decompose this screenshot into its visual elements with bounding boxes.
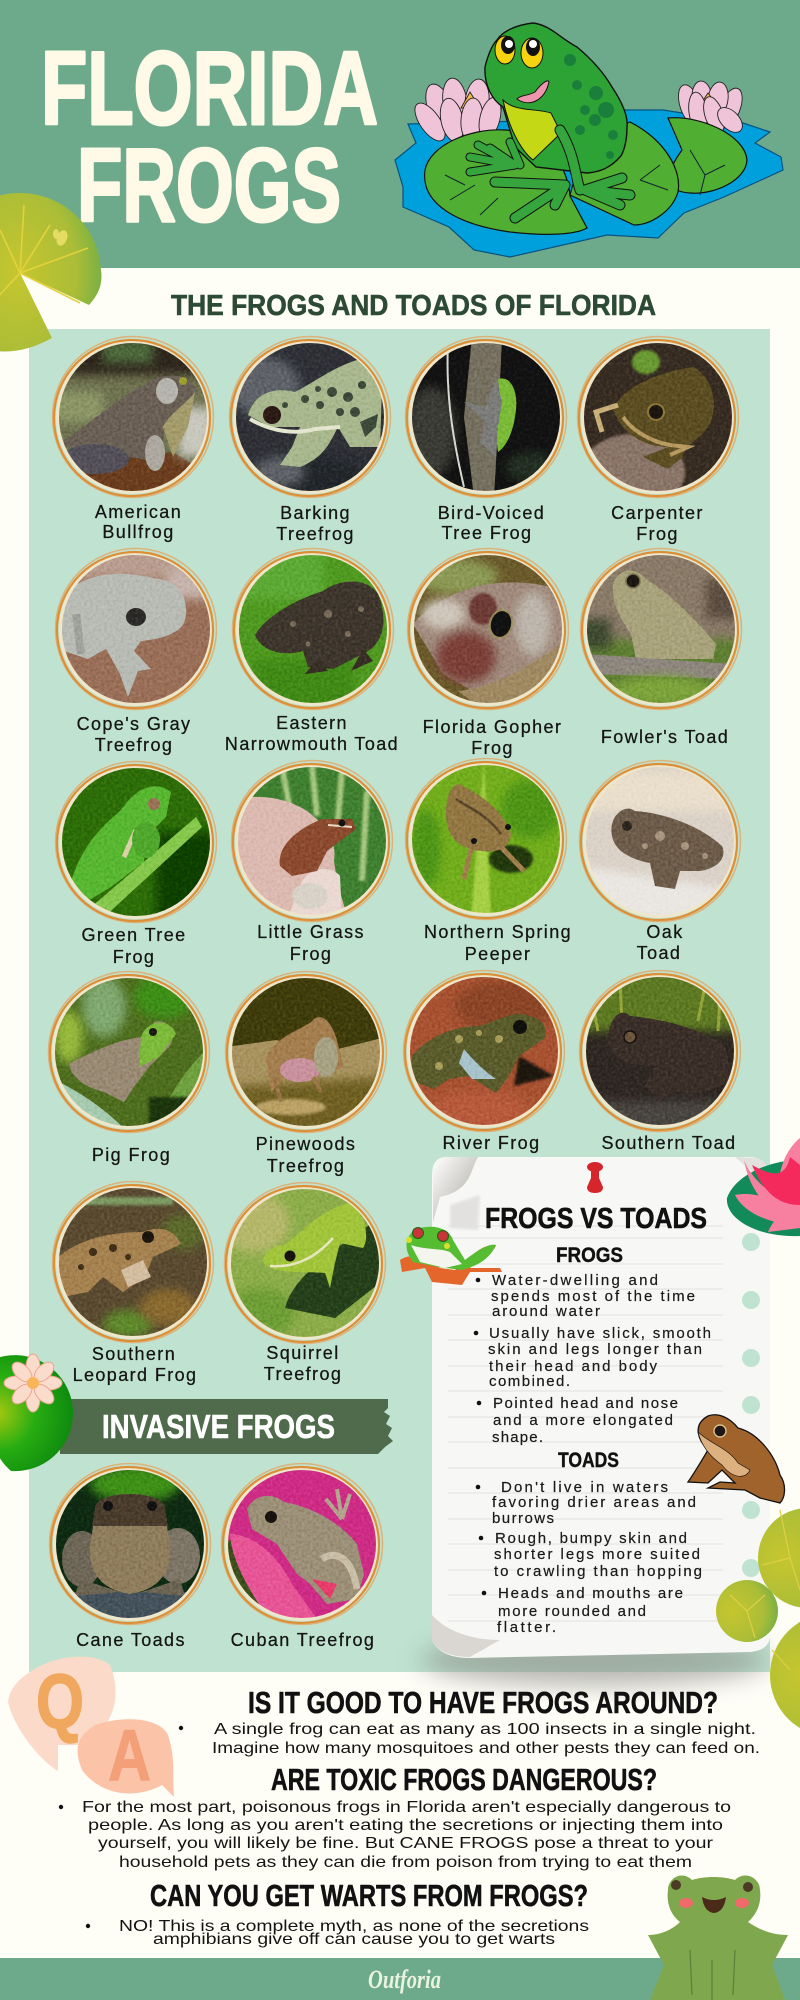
frogs bullet list: Water-dwelling and — [492, 1272, 658, 1289]
question: can you get warts from frogs: CAN YOU GET WARTS FROM FROGS? — [150, 1878, 588, 1913]
labels for frog photos: Green Tree — [81, 925, 187, 945]
frogs bullet list: Usually have slick, smooth — [489, 1325, 711, 1342]
lotus right — [674, 80, 747, 137]
labels for frog photos: Peeper — [465, 944, 531, 964]
photo: Barking Treefrog — [230, 336, 390, 498]
lily pads — [668, 118, 747, 193]
labels for frog photos: Toad — [637, 943, 681, 963]
title: FROGS — [77, 128, 341, 244]
panel: frogs vs toads paper note — [432, 1157, 770, 1658]
brush band: invasive frogs: INVASIVE FROGS — [102, 1408, 335, 1445]
labels for frog photos: Leopard Frog — [73, 1365, 197, 1385]
toads bullet list: more rounded and — [498, 1603, 646, 1620]
question: are toxic frogs dangerous: people. As long as you aren't eating the secretions or injecting them into — [88, 1817, 723, 1834]
labels for frog photos: Treefrog — [267, 1156, 345, 1176]
question: is it good to have frogs around: Imagine how many mosquitoes and other pests they can feed on. — [212, 1740, 760, 1757]
labels for frog photos: Oak — [646, 922, 684, 942]
labels for frog photos: Tree Frog — [442, 523, 532, 543]
labels for frog photos: Florida Gopher — [423, 717, 562, 737]
frogs bullet list: combined. — [489, 1373, 570, 1390]
labels for frog photos: Squirrel — [266, 1343, 340, 1363]
toads bullet list: shorter legs more suited — [494, 1546, 700, 1563]
photo: Cane Toads — [50, 1464, 210, 1624]
labels for frog photos: Cane Toads — [76, 1630, 186, 1650]
labels for frog photos: Little Grass — [257, 922, 365, 942]
photo: Florida Gopher Frog — [408, 548, 568, 714]
photo: Southern Toad — [580, 970, 740, 1132]
photo: Little Grass Frog — [232, 760, 392, 922]
Q and A speech bubbles: A — [108, 1716, 151, 1796]
pond — [395, 110, 783, 257]
illustration: cartoon frog on lily pads — [395, 23, 783, 257]
labels for frog photos: Cope's Gray — [77, 714, 191, 734]
toads bullet list: favoring drier areas and — [492, 1494, 696, 1511]
photo: American Bullfrog — [52, 336, 214, 498]
labels for frog photos: Southern — [92, 1344, 176, 1364]
photo: Oak Toad — [580, 760, 740, 922]
labels for frog photos: Frog — [113, 947, 155, 967]
frogs bullet list: spends most of the time — [491, 1288, 695, 1305]
paper heading: FROGS VS TOADS — [485, 1203, 707, 1235]
brush band: invasive frogs — [60, 1399, 393, 1454]
punched holes — [742, 1233, 760, 1577]
icons: olive lily pads bottom right — [716, 1508, 800, 1737]
question: are toxic frogs dangerous: For the most part, poisonous frogs in Florida aren't especially dangerous to — [82, 1799, 731, 1816]
labels for frog photos: Treefrog — [95, 735, 173, 755]
footer logo: Outforia: Outforia — [368, 1965, 441, 1994]
eyes — [495, 36, 515, 64]
photo: Pinewoods Treefrog — [226, 972, 386, 1132]
lotus left — [409, 77, 508, 146]
icon: brown toad illustration — [688, 1415, 785, 1503]
labels for frog photos: Treefrog — [264, 1364, 342, 1384]
icon: red-eyed tree frog — [400, 1227, 502, 1285]
labels for frog photos — [73, 502, 736, 1650]
labels for frog photos: Pig Frog — [92, 1145, 171, 1165]
labels for frog photos: Pinewoods — [256, 1134, 356, 1154]
question: is it good to have frogs around: A single frog can eat as many as 100 insects in a single night. — [214, 1721, 756, 1738]
frogs bullet list — [474, 1272, 711, 1446]
icon: green lily pad with pink flower — [0, 1354, 73, 1471]
question: can you get warts from frogs: NO! This is a complete myth, as none of the secretions — [119, 1918, 589, 1935]
photo: Cuban Treefrog — [222, 1464, 382, 1624]
question: are toxic frogs dangerous: ARE TOXIC FROGS DANGEROUS? — [271, 1762, 657, 1797]
title — [41, 31, 378, 244]
paper shadow — [420, 1634, 770, 1686]
labels for frog photos: American — [95, 502, 182, 522]
toads bullet list: Heads and mouths are — [498, 1585, 683, 1602]
labels for frog photos: Frog — [471, 738, 514, 758]
question: can you get warts from frogs — [86, 1878, 589, 1948]
question: is it good to have frogs around — [179, 1685, 760, 1757]
icon: smiling green frog — [648, 1875, 788, 2000]
labels for frog photos: Carpenter — [611, 503, 704, 523]
frogs bullet list: shape. — [492, 1429, 543, 1446]
photo: Bird-Voiced Tree Frog — [406, 336, 566, 498]
mouth — [517, 81, 549, 103]
frogs bullet list: and a more elongated — [493, 1412, 673, 1429]
labels for frog photos: Barking — [280, 503, 351, 523]
header band — [0, 0, 800, 268]
question: are toxic frogs dangerous — [59, 1762, 731, 1871]
heading: the frogs and toads of florida: THE FROGS AND TOADS OF FLORIDA — [171, 290, 656, 322]
toads bullet list: Rough, bumpy skin and — [495, 1530, 687, 1547]
toads subheading: TOADS — [558, 1449, 619, 1472]
toads bullet list: Don't live in waters — [501, 1479, 668, 1496]
photo: Southern Leopard Frog — [52, 1182, 214, 1342]
toads bullet list: burrows — [492, 1510, 554, 1527]
question: are toxic frogs dangerous: yourself, you will likely be fine. But CANE FROGS pose a threat to your — [98, 1835, 714, 1852]
icon: lime lily pad top left — [0, 193, 101, 352]
photo: Cope's Gray Treefrog — [56, 548, 216, 710]
photo: Eastern Narrowmouth Toad — [232, 548, 394, 710]
frogs bullet list: their head and body — [489, 1358, 658, 1375]
panel: frog list background — [29, 329, 770, 1672]
labels for frog photos: Bullfrog — [102, 522, 175, 542]
frogs subheading: FROGS — [556, 1244, 623, 1267]
labels for frog photos: Narrowmouth Toad — [225, 734, 399, 754]
belly — [503, 100, 561, 160]
labels for frog photos: Bird-Voiced — [438, 503, 545, 523]
frog body — [485, 23, 627, 173]
photo: Pig Frog — [48, 972, 210, 1132]
toads bullet list — [476, 1479, 702, 1636]
toads bullet list: flatter. — [497, 1619, 556, 1636]
Q and A speech bubbles: Q — [36, 1659, 84, 1745]
legs and feet — [470, 130, 630, 218]
labels for frog photos: Treefrog — [276, 524, 355, 544]
photo: River Frog — [404, 970, 564, 1132]
labels for frog photos: Fowler's Toad — [601, 727, 729, 747]
question: are toxic frogs dangerous: household pets as they can die from poison from trying to eat them — [119, 1854, 692, 1871]
photo: Green Tree Frog — [56, 762, 216, 922]
title: FLORIDA — [41, 31, 378, 147]
ruled lines — [448, 1226, 723, 1621]
photo: Carpenter Frog — [578, 336, 738, 510]
Q bubble — [8, 1657, 116, 1771]
labels for frog photos: Eastern — [276, 713, 348, 733]
labels for frog photos: Southern Toad — [602, 1133, 736, 1153]
Q and A speech bubbles — [8, 1657, 174, 1797]
photo: Northern Spring Peeper — [406, 758, 566, 920]
A bubble — [78, 1719, 174, 1797]
labels for frog photos: River Frog — [442, 1133, 541, 1153]
frogs bullet list: skin and legs longer than — [488, 1341, 702, 1358]
spots — [564, 54, 618, 159]
frogs bullet list: Pointed head and nose — [493, 1395, 678, 1412]
labels for frog photos: Cuban Treefrog — [231, 1630, 375, 1650]
labels for frog photos: Frog — [290, 944, 332, 964]
toads bullet list: to crawling than hopping — [494, 1563, 702, 1580]
labels for frog photos: Northern Spring — [424, 922, 572, 942]
photo: Fowler's Toad — [580, 548, 742, 710]
icon: pink water lily on dark pad — [727, 1138, 800, 1236]
curled corners — [433, 1157, 478, 1222]
icon: red push pin — [587, 1162, 603, 1193]
question: can you get warts from frogs: amphibians give off can cause you to get warts — [153, 1931, 555, 1948]
labels for frog photos: Frog — [636, 524, 679, 544]
photo: Squirrel Treefrog — [220, 1182, 386, 1344]
footer band — [0, 1958, 800, 2000]
frogs bullet list: around water — [492, 1303, 600, 1320]
